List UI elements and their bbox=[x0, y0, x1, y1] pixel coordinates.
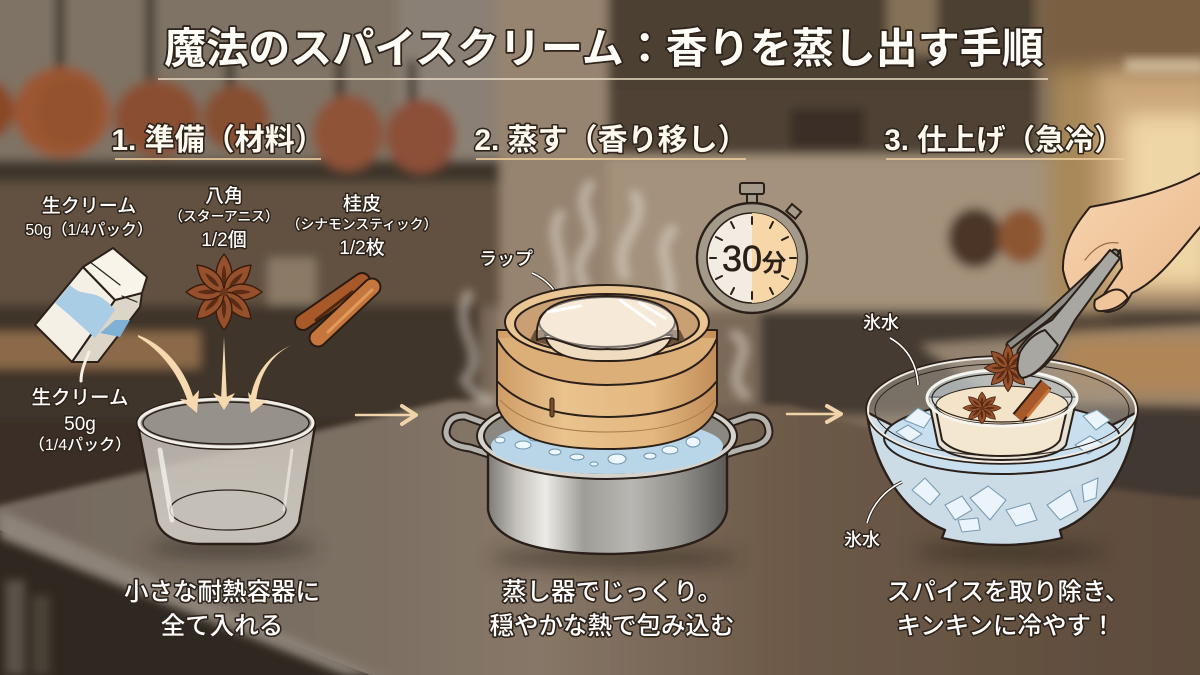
arrows into glass bbox=[138, 335, 292, 413]
ingredient label: cinnamon bbox=[287, 193, 437, 259]
ingredient label: star anise bbox=[169, 185, 279, 251]
tongs tip over star bbox=[1017, 330, 1058, 378]
step 3 heading: 3. 仕上げ（急冷） bbox=[884, 124, 1124, 157]
ingredient label: cinnamon: 桂皮 bbox=[343, 193, 381, 215]
ingredient label: cinnamon: （シナモンスティック） bbox=[287, 217, 437, 232]
caption step 1: 全て入れる bbox=[161, 612, 283, 640]
tongs bbox=[1010, 250, 1120, 378]
arrow: step 2 to step 3 bbox=[787, 406, 841, 422]
label: wrap: ラップ bbox=[479, 249, 533, 269]
cream bowl under wrap bbox=[537, 296, 678, 361]
ingredient label: cinnamon: 1/2枚 bbox=[339, 237, 385, 259]
star anise held by tongs bbox=[984, 344, 1032, 392]
glass bowl bbox=[137, 397, 315, 544]
label: ice water upper bbox=[863, 313, 918, 385]
icon: star anise bbox=[186, 254, 262, 330]
icon: cinnamon stick bbox=[303, 281, 372, 338]
label: ice water upper: 氷水 bbox=[863, 313, 899, 333]
icon: cream carton bbox=[35, 248, 147, 381]
caption step 3: キンキンに冷やす！ bbox=[896, 612, 1116, 640]
timer: 30 minutes bbox=[697, 183, 807, 313]
caption step 2 bbox=[490, 578, 734, 640]
bamboo steamer bbox=[497, 285, 717, 449]
timer: 30 minutes: 30分 bbox=[722, 238, 786, 279]
star anise in cup bbox=[963, 392, 1001, 424]
caption step 3 bbox=[887, 578, 1129, 640]
caption step 3: スパイスを取り除き、 bbox=[887, 578, 1129, 606]
label: cream amount: （1/4パック） bbox=[29, 436, 131, 454]
hand bbox=[1063, 172, 1200, 312]
title: 魔法のスパイスクリーム：香りを蒸し出す手順 bbox=[164, 25, 1044, 72]
caption step 2: 蒸し器でじっくり。 bbox=[502, 578, 722, 606]
label: ice water lower: 氷水 bbox=[844, 530, 880, 550]
arrow: step 1 to step 2 bbox=[356, 406, 416, 424]
label: wrap bbox=[479, 249, 562, 308]
ice cubes bbox=[896, 408, 1110, 532]
step 1 heading: 1. 準備（材料） bbox=[111, 124, 325, 157]
ingredient label: star anise: （スターアニス） bbox=[169, 209, 279, 224]
object shadows on counter bbox=[147, 538, 1105, 569]
caption step 2: 穏やかな熱で包み込む bbox=[490, 612, 734, 640]
bowl rim bbox=[867, 357, 1137, 463]
ingredient label: cream: 50g（1/4パック） bbox=[25, 221, 153, 239]
steam bbox=[463, 185, 745, 400]
label: cream amount: 50g bbox=[64, 414, 96, 435]
ingredient label: star anise: 1/2個 bbox=[201, 229, 247, 251]
inner cup with cream and spices bbox=[927, 370, 1077, 460]
pot handles bbox=[446, 416, 769, 455]
boiling water bbox=[491, 418, 723, 474]
fingers over tongs bbox=[1094, 290, 1128, 311]
caption step 1: 小さな耐熱容器に bbox=[124, 578, 320, 606]
label: ice water lower bbox=[844, 482, 902, 550]
caption step 1 bbox=[124, 578, 320, 640]
cinnamon in cup bbox=[1018, 384, 1050, 418]
pot bbox=[477, 393, 737, 554]
step 2 heading: 2. 蒸す（香り移し） bbox=[474, 124, 748, 157]
ingredient label: cream: 生クリーム bbox=[42, 195, 136, 217]
label: cream amount: 生クリーム bbox=[32, 387, 128, 409]
ingredient label: star anise: 八角 bbox=[205, 185, 243, 207]
ingredient label: cream bbox=[25, 195, 153, 239]
ice water bowl bbox=[867, 359, 1137, 545]
label: cream amount bbox=[29, 387, 131, 454]
